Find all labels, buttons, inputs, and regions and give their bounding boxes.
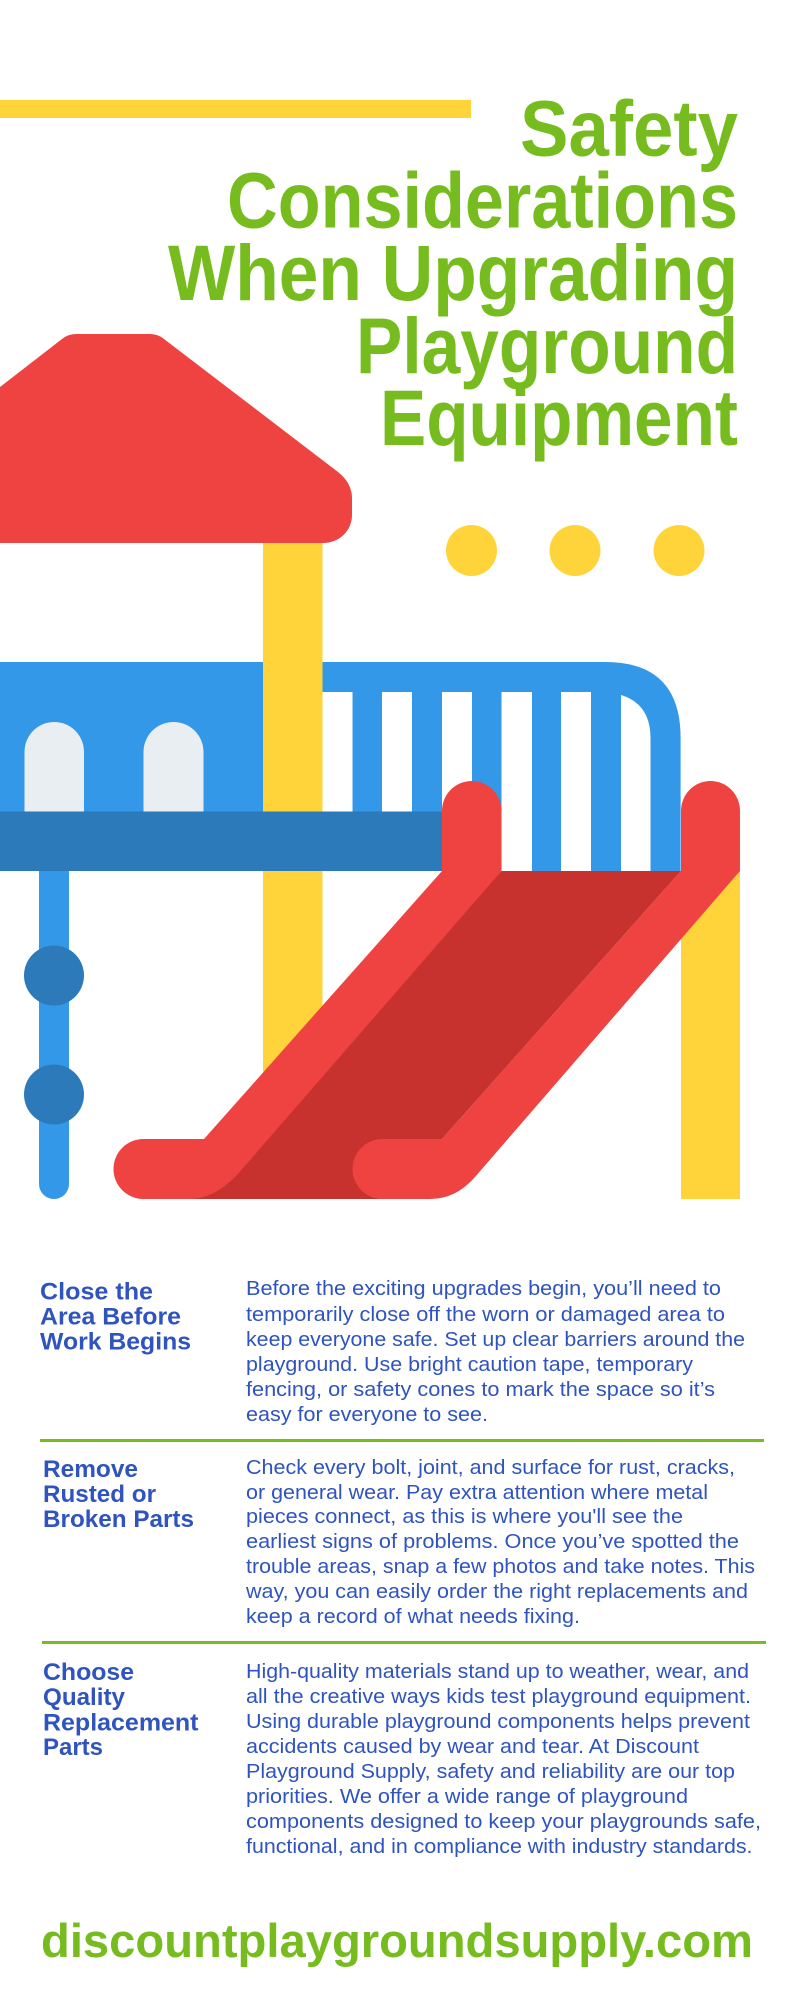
playground illustration bbox=[0, 334, 740, 1199]
slide bed bbox=[190, 871, 681, 1199]
body text: Playground Supply, safety and reliability are our top bbox=[246, 1760, 735, 1783]
body text: earliest signs of problems. Once you’ve spotted the bbox=[246, 1530, 739, 1553]
title bbox=[168, 84, 738, 462]
section: remove rusted parts bbox=[43, 1456, 755, 1628]
right yellow support post bbox=[681, 860, 740, 1199]
title: Considerations bbox=[227, 156, 738, 244]
body text: priorities. We offer a wide range of playground bbox=[246, 1785, 688, 1808]
rope knots bbox=[24, 946, 84, 1124]
heading: Close the bbox=[40, 1278, 153, 1306]
roof bbox=[0, 334, 352, 543]
section: close the area bbox=[40, 1277, 745, 1426]
heading: Area Before bbox=[40, 1304, 181, 1330]
body text: Before the exciting upgrades begin, you’ll need to bbox=[246, 1277, 721, 1300]
body text: playground. Use bright caution tape, temporary bbox=[246, 1353, 694, 1376]
body text: trouble areas, snap a few photos and take notes. This bbox=[246, 1555, 755, 1578]
body text: way, you can easily order the right replacements and bbox=[245, 1580, 748, 1603]
body text bbox=[246, 1660, 761, 1858]
three yellow dots bbox=[446, 525, 704, 576]
heading bbox=[40, 1278, 191, 1356]
body text: keep a record of what needs fixing. bbox=[246, 1605, 580, 1628]
body text: or general wear. Pay extra attention where metal bbox=[246, 1481, 708, 1504]
body text: Using durable playground components helps prevent bbox=[246, 1710, 750, 1733]
body text: High-quality materials stand up to weather, wear, and bbox=[246, 1660, 749, 1683]
platform deck bbox=[0, 812, 445, 871]
divider bbox=[42, 1641, 766, 1644]
body text: Check every bolt, joint, and surface for rust, cracks, bbox=[246, 1456, 735, 1479]
heading: Work Begins bbox=[40, 1328, 191, 1356]
heading: Replacement bbox=[43, 1710, 199, 1736]
blue railing bbox=[322, 662, 681, 872]
body text: keep everyone safe. Set up clear barriers around the bbox=[246, 1328, 745, 1351]
blue wall panel bbox=[0, 662, 263, 812]
heading: Rusted or bbox=[43, 1481, 156, 1508]
heading bbox=[43, 1456, 194, 1533]
body text: components designed to keep your playgrounds safe, bbox=[246, 1810, 761, 1833]
heading bbox=[43, 1659, 199, 1761]
body text: accidents caused by wear and tear. At Discount bbox=[246, 1735, 699, 1758]
heading: Parts bbox=[43, 1734, 103, 1761]
slide right rail bbox=[353, 781, 740, 1199]
website url: discountplaygroundsupply.com bbox=[41, 1915, 753, 1968]
heading: Remove bbox=[43, 1456, 138, 1483]
body text bbox=[245, 1456, 755, 1628]
climbing rope bbox=[39, 871, 69, 1199]
rear yellow support post bbox=[263, 540, 322, 1080]
divider bbox=[40, 1439, 764, 1442]
body text: easy for everyone to see. bbox=[246, 1403, 488, 1426]
body text: all the creative ways kids test playground equipment. bbox=[246, 1685, 751, 1708]
accent bar bbox=[0, 100, 471, 118]
body text bbox=[246, 1277, 745, 1426]
body text: temporarily close off the worn or damaged area to bbox=[246, 1303, 725, 1326]
title: Equipment bbox=[380, 373, 738, 462]
title: Playground bbox=[356, 301, 738, 390]
slide left rail bbox=[114, 781, 502, 1199]
section: choose quality parts bbox=[43, 1659, 761, 1858]
title: Safety bbox=[520, 84, 738, 172]
body text: functional, and in compliance with industry standards. bbox=[246, 1835, 752, 1858]
body text: fencing, or safety cones to mark the space so it’s bbox=[246, 1378, 715, 1401]
title: When Upgrading bbox=[168, 228, 738, 317]
heading: Quality bbox=[43, 1684, 126, 1711]
arched windows bbox=[24, 722, 204, 812]
body text: pieces connect, as this is where you'll see the bbox=[246, 1505, 683, 1528]
heading: Choose bbox=[43, 1659, 134, 1686]
heading: Broken Parts bbox=[43, 1506, 194, 1533]
